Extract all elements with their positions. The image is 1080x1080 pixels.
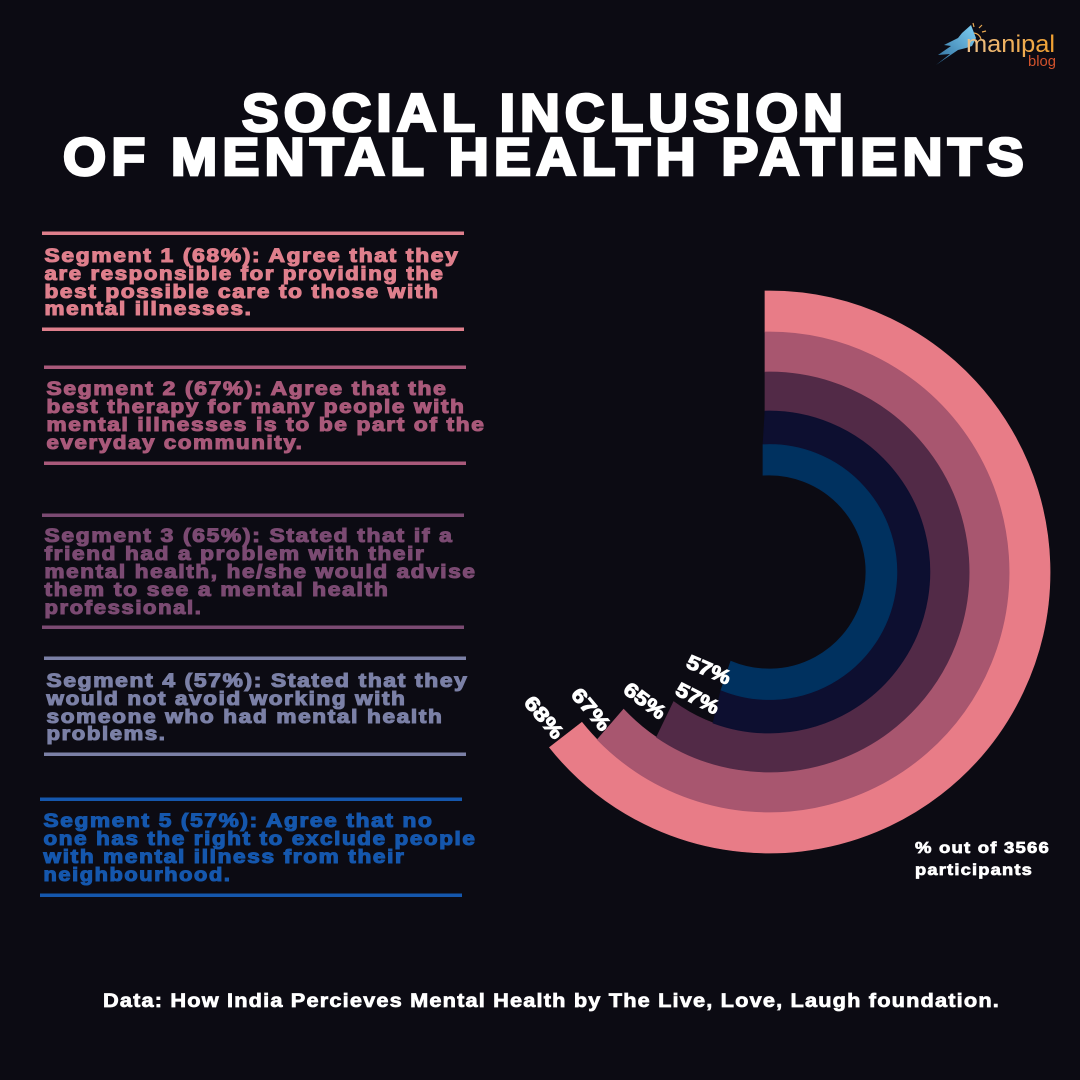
panel: segment 2: Segment 2 (67%): Agree that the [46,379,448,400]
ring: segment 5, 57% [721,445,897,700]
panel: segment 1: best possible care to those with [44,282,440,303]
title [63,84,1029,187]
label: 65%: 65% [619,678,670,724]
panel: segment 4: problems. [46,724,166,745]
panel: segment 5: Segment 5 (57%): Agree that no [44,811,434,832]
note: participants: % out of 3566 [915,840,1050,857]
chart: radial bar chart [519,291,1050,853]
note: participants [915,840,1050,879]
panel: segment 4: Segment 4 (57%): Stated that they [46,671,469,692]
panel: segment 2: everyday community. [46,433,304,454]
panel: segment 4: would not avoid working with [45,689,406,710]
icon: sun rays [973,23,986,39]
panel: segment 4: someone who had mental health [46,707,443,728]
source note: Data: How India Percieves Mental Health by The Live, Love, Laugh foundation. [103,991,1000,1012]
title: OF MENTAL HEALTH PATIENTS [63,128,1029,187]
ring: segment 2, 67% [597,332,1009,812]
label: 57% navy ring: 57% [672,679,723,719]
panel: segment 2: mental illnesses is to be part of the [46,415,486,436]
label: 67%: 67% [566,684,615,736]
panel: segment 4 [44,656,469,756]
panel: segment 3: them to see a mental health [44,580,390,601]
panel: segment 1: Segment 1 (68%): Agree that they [44,246,460,267]
panel: segment 2 [44,366,486,465]
panel: segment 1: mental illnesses. [44,299,253,320]
panel: segment 5 [40,798,477,897]
title: SOCIAL INCLUSION [242,84,848,143]
label: 68%: 68% [519,692,568,744]
panel: segment 3: professional. [44,598,202,619]
panel: segment 5: with mental illness from their [42,847,406,868]
panel: segment 3 [42,514,476,629]
icon: blue wing brush strokes [936,25,976,65]
panel: segment 3: friend had a problem with their [44,544,426,565]
panel: segment 3: mental health, he/she would advise [44,562,476,583]
logo subtext: blog [1028,53,1056,70]
panel: segment 3: Segment 3 (65%): Stated that if a [44,526,454,547]
note: participants: participants [915,862,1033,879]
panel: segment 5: neighbourhood. [44,865,232,886]
label: 57% blue ring: 57% [683,651,734,690]
panel: segment 1 [42,232,464,331]
logo: manipal blog [936,23,1056,70]
logo wordmark: manipal [966,31,1055,58]
ring: segment 1, 68% [550,291,1050,853]
panel: segment 5: one has the right to exclude people [44,829,477,850]
ring: segment 3, 65% [656,372,969,772]
panel: segment 1: are responsible for providing the [44,264,444,285]
panel: segment 2: best therapy for many people with [46,397,466,418]
ring: segment 4, 57% [713,411,930,733]
